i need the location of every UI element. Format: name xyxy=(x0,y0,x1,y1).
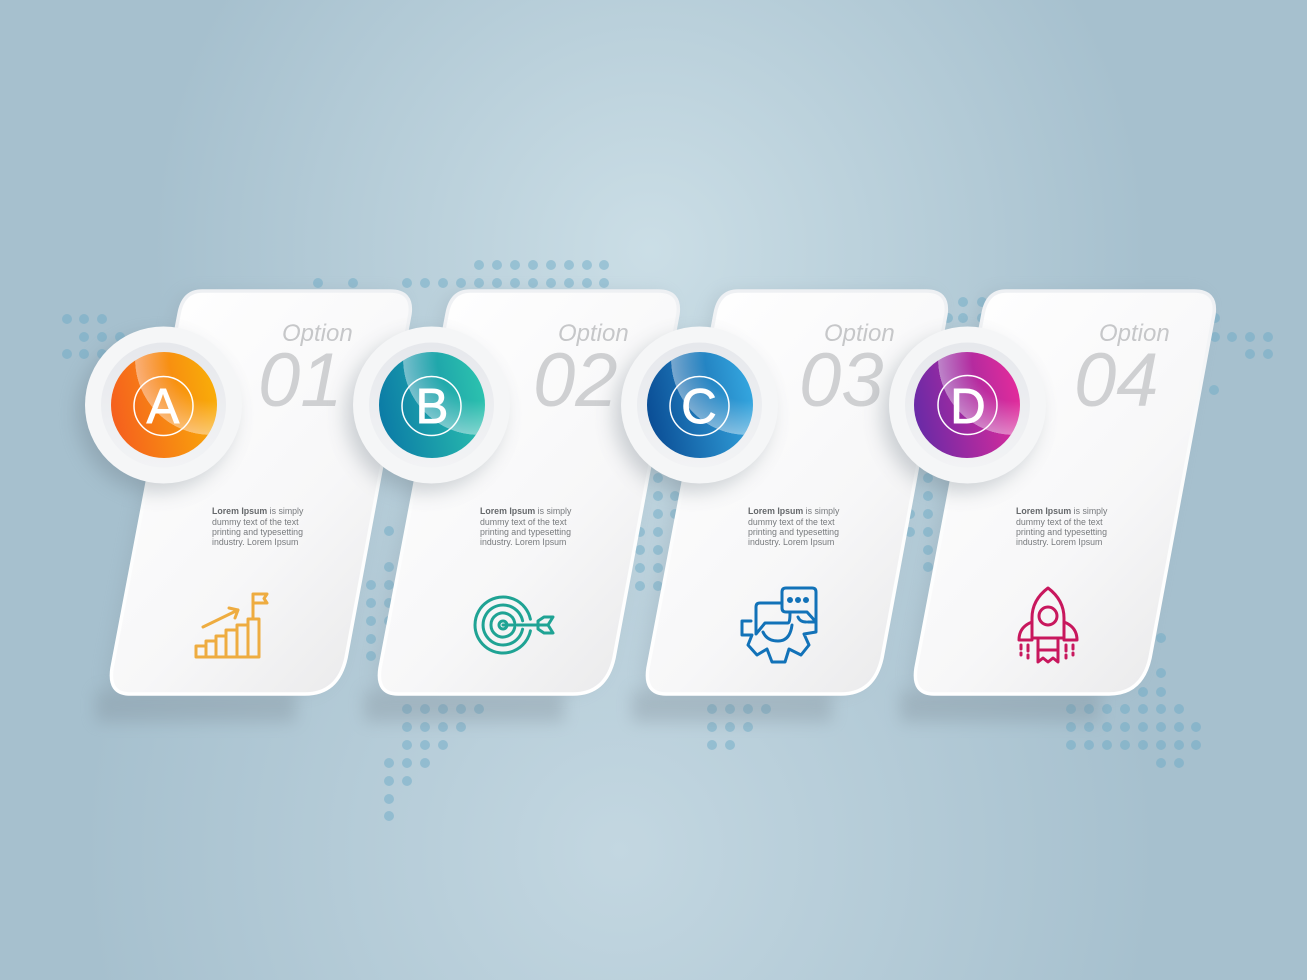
number 01: 01 xyxy=(258,338,343,423)
description text 04: dummy text of the text xyxy=(1016,517,1103,527)
badge A: A xyxy=(147,380,180,434)
description text 04: is simply xyxy=(1074,506,1107,516)
icon: rocket xyxy=(1019,588,1077,662)
option 03 heading: Option xyxy=(824,320,895,347)
badge D xyxy=(874,326,1046,500)
badge C xyxy=(606,326,778,500)
panel: option 01 xyxy=(78,283,410,722)
description text 03: dummy text of the text xyxy=(748,517,835,527)
description text 02: industry. Lorem Ipsum xyxy=(480,537,566,547)
panel: option 03 xyxy=(614,283,946,722)
number 04: 04 xyxy=(1074,338,1159,423)
number 03: 03 xyxy=(799,338,884,423)
description text 03: is simply xyxy=(806,506,839,516)
description text 02: is simply xyxy=(538,506,571,516)
description text 02: printing and typesetting xyxy=(480,527,571,537)
description text 04: Lorem Ipsum xyxy=(1016,506,1071,516)
description text 02: dummy text of the text xyxy=(480,517,567,527)
icon: growth chart with flag xyxy=(196,594,267,657)
icon: target with arrow xyxy=(475,597,553,653)
description text 01: dummy text of the text xyxy=(212,517,299,527)
description text 03: industry. Lorem Ipsum xyxy=(748,537,834,547)
badge A xyxy=(74,326,242,500)
badge D: D xyxy=(950,380,986,434)
badge B: B xyxy=(416,380,448,434)
option 04 heading: Option xyxy=(1099,320,1170,347)
description text 03: Lorem Ipsum xyxy=(748,506,803,516)
description text 01: industry. Lorem Ipsum xyxy=(212,537,298,547)
number 02: 02 xyxy=(533,338,618,423)
description text 01: printing and typesetting xyxy=(212,527,303,537)
description text 01: is simply xyxy=(270,506,303,516)
description text 01: Lorem Ipsum xyxy=(212,506,267,516)
panel: option 02 xyxy=(346,283,678,722)
description text 02: Lorem Ipsum xyxy=(480,506,535,516)
badge B xyxy=(338,326,510,500)
description text 03: printing and typesetting xyxy=(748,527,839,537)
badge C: C xyxy=(681,380,717,434)
option 02 heading: Option xyxy=(558,320,629,347)
dotted world map xyxy=(62,260,1273,821)
icon: chat bubbles and gear xyxy=(742,588,816,662)
description text 04: industry. Lorem Ipsum xyxy=(1016,537,1102,547)
panel: option 04 xyxy=(882,283,1214,722)
option 01 heading: Option xyxy=(282,320,353,347)
description text 04: printing and typesetting xyxy=(1016,527,1107,537)
